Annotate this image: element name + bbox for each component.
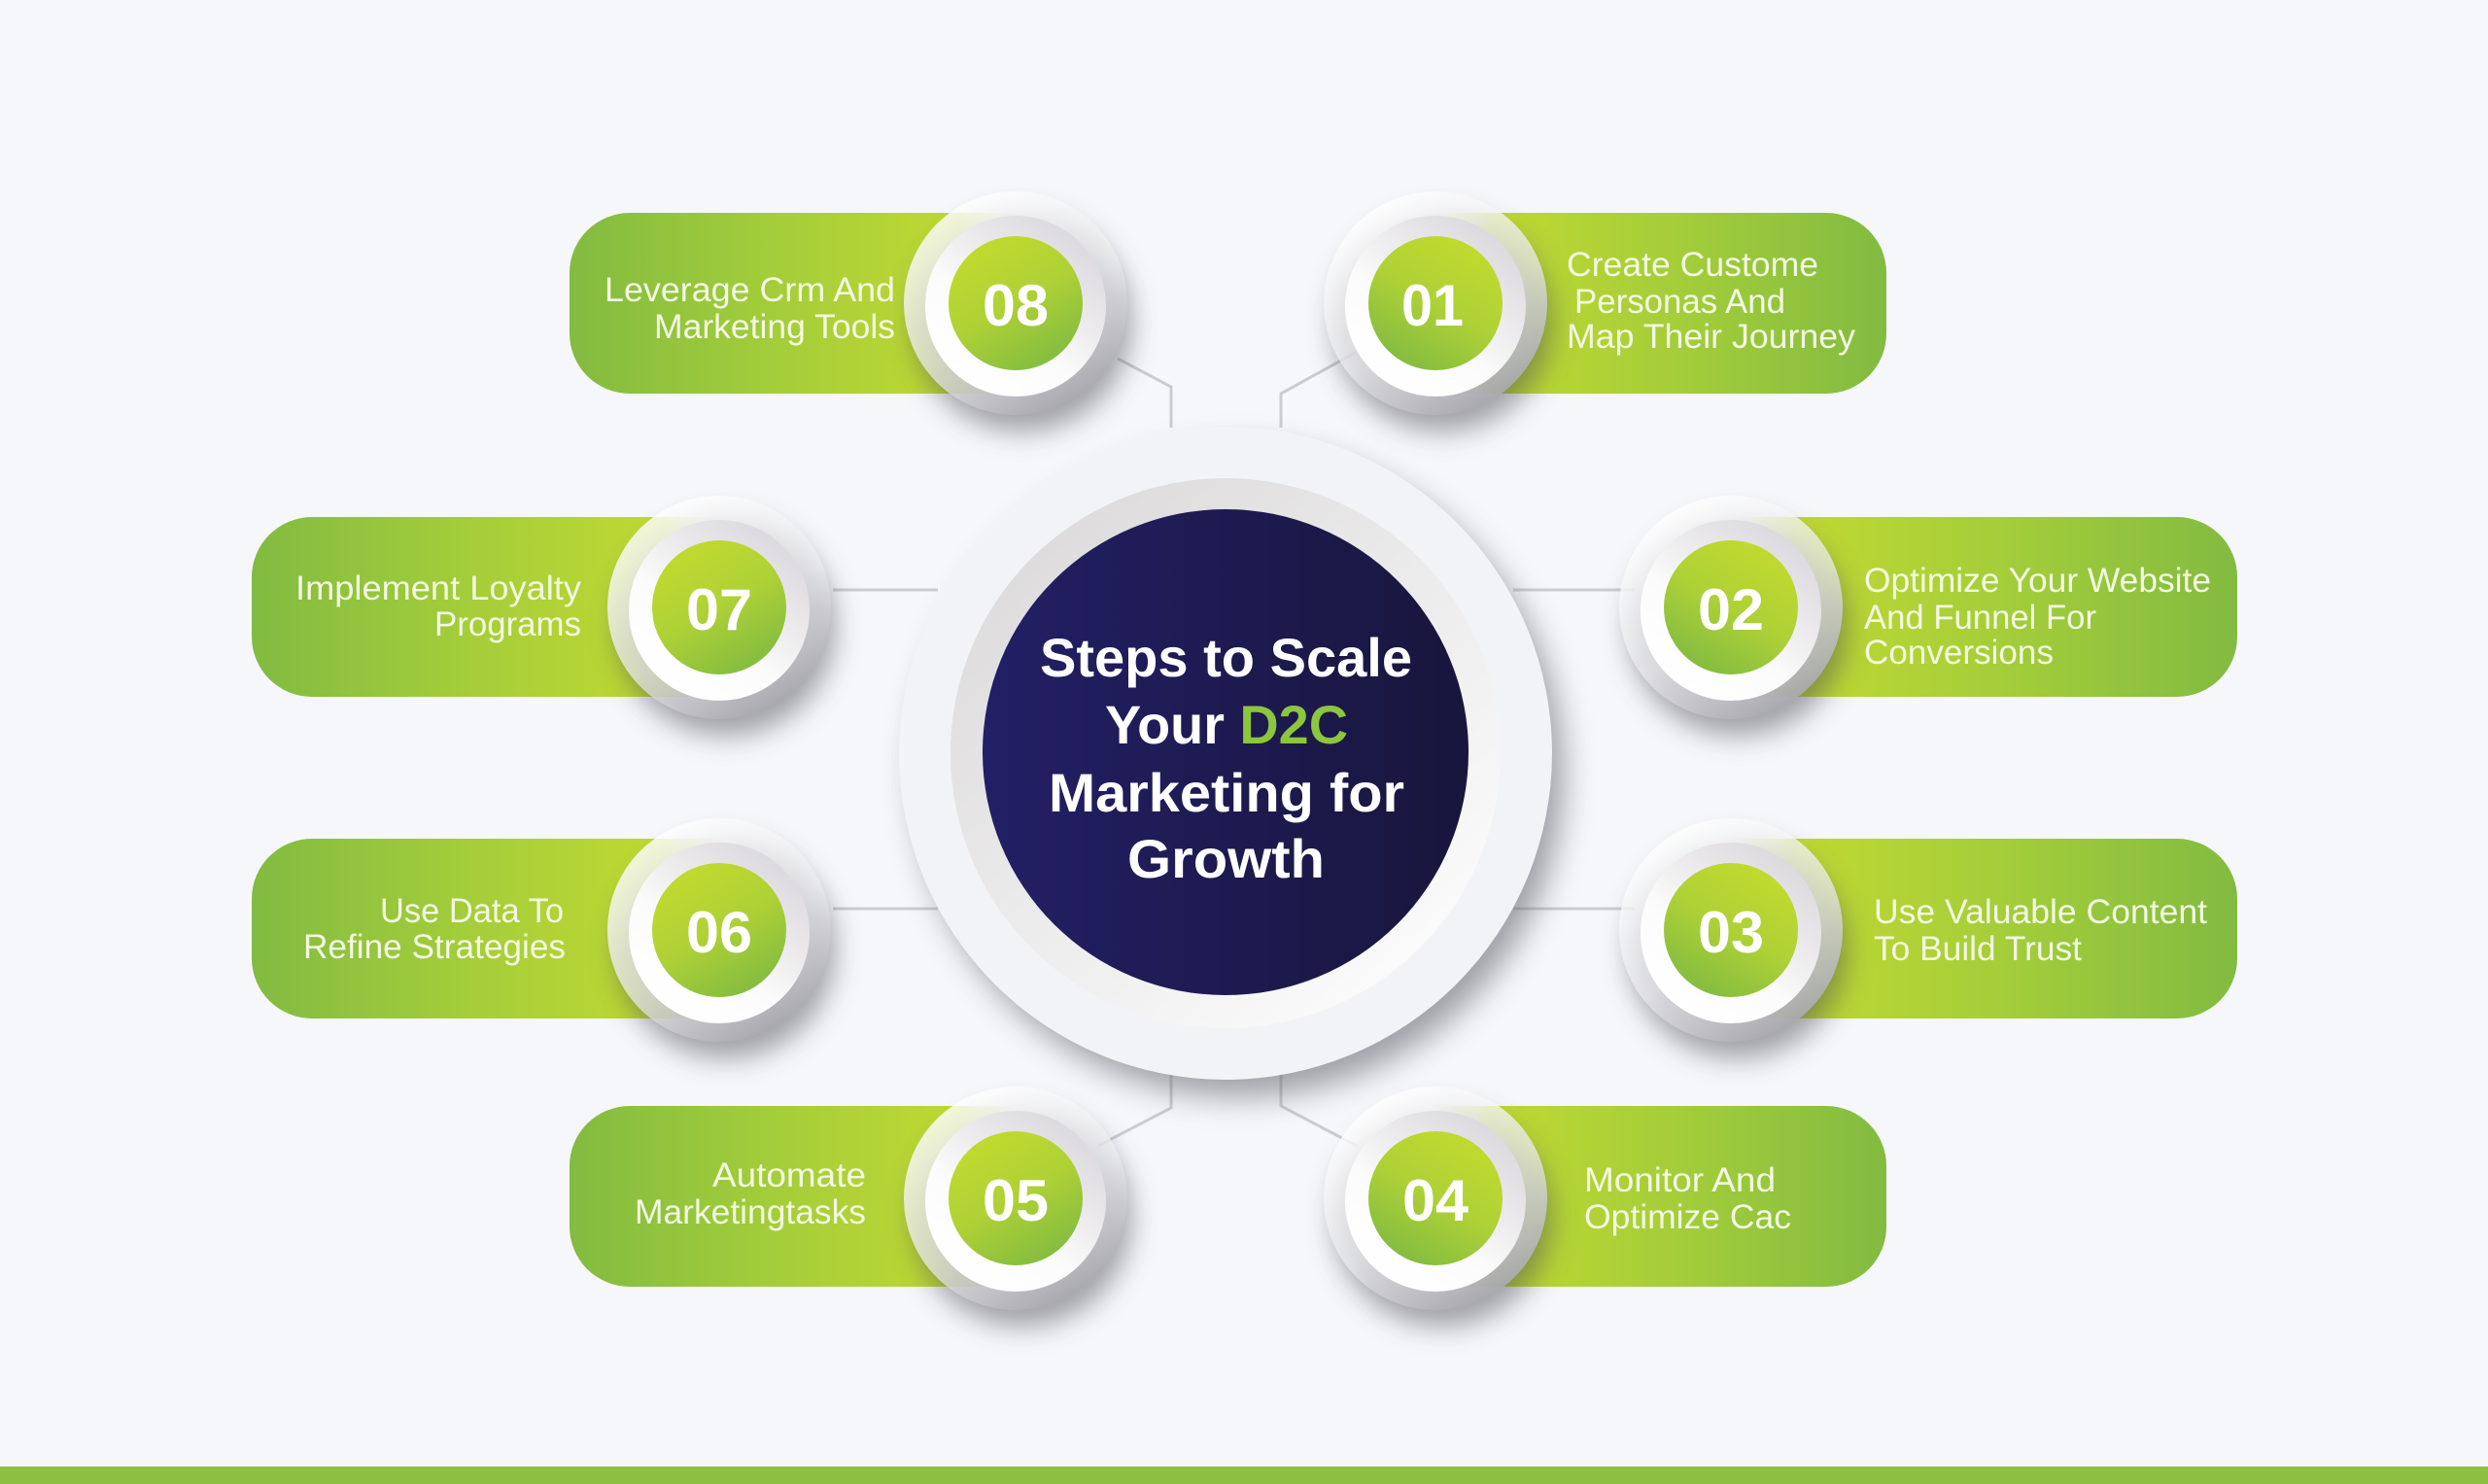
step 08 [570,191,1131,431]
label 06: Refine Strategies [303,928,566,966]
pill 04 [1434,1106,1886,1287]
label 07: Implement Loyalty [295,569,582,607]
label 02: And Funnel For [1864,599,2096,637]
badge 03: 03 [1698,900,1764,965]
footer bar [0,1467,2488,1484]
label 08: Marketing Tools [654,308,895,346]
central hub [899,427,1564,1097]
step 07 [252,496,835,736]
label 01: Map Their Journey [1567,318,1855,356]
label 06: Use Data To [380,892,564,930]
label 04: Optimize Cac [1584,1198,1791,1236]
label 02: Optimize Your Website [1864,562,2211,600]
label 02: Conversions [1864,634,2054,672]
badge 04: 04 [1402,1168,1469,1233]
badge 05 [904,1087,1131,1327]
pill 01 [1434,213,1886,394]
label 05: Marketingtasks [635,1193,866,1231]
badge 06 [607,818,835,1058]
step 03 [1619,818,2237,1058]
label 01: Create Custome [1567,246,1818,284]
badge 05: 05 [983,1168,1049,1233]
label 06 [303,892,566,966]
label 03: Use Valuable Content [1874,893,2207,931]
label 03 [1874,893,2207,968]
label 01: Personas And [1574,283,1785,321]
label 08: Leverage Crm And [605,271,895,309]
label 08 [605,271,895,346]
pill 02 [1731,517,2237,697]
badge 01: 01 [1401,273,1464,338]
pill 07 [252,517,719,697]
pill 06 [252,839,719,1018]
badge 08: 08 [983,273,1049,338]
label 02 [1864,562,2211,672]
label 01 [1567,246,1855,356]
badge 07 [607,496,835,736]
step 01 [1324,191,1886,431]
badge 08 [904,191,1131,431]
title: Growth [1127,828,1325,889]
step 06 [252,818,835,1058]
badge 02 [1619,496,1847,736]
step 02 [1619,496,2237,736]
title: Your D2C [1105,694,1348,755]
step 05 [570,1087,1131,1327]
label 07 [295,569,582,643]
title: Marketing for [1049,762,1404,823]
label 04: Monitor And [1584,1161,1776,1199]
pill 05 [570,1106,1016,1287]
title: Steps to Scale [1040,627,1412,688]
pill 08 [570,213,1016,394]
title [1040,627,1412,889]
badge 03 [1619,818,1847,1058]
badge 02: 02 [1698,577,1764,642]
connector lines [833,352,1635,1146]
label 03: To Build Trust [1874,930,2082,968]
badge 07: 07 [686,577,752,642]
badge 06: 06 [686,900,752,965]
label 04 [1584,1161,1791,1236]
pill 03 [1731,839,2237,1018]
badge 01 [1324,191,1551,431]
label 05: Automate [712,1156,866,1194]
step 04 [1324,1087,1886,1327]
label 07: Programs [434,605,581,643]
label 05 [635,1156,866,1231]
badge 04 [1324,1087,1551,1327]
